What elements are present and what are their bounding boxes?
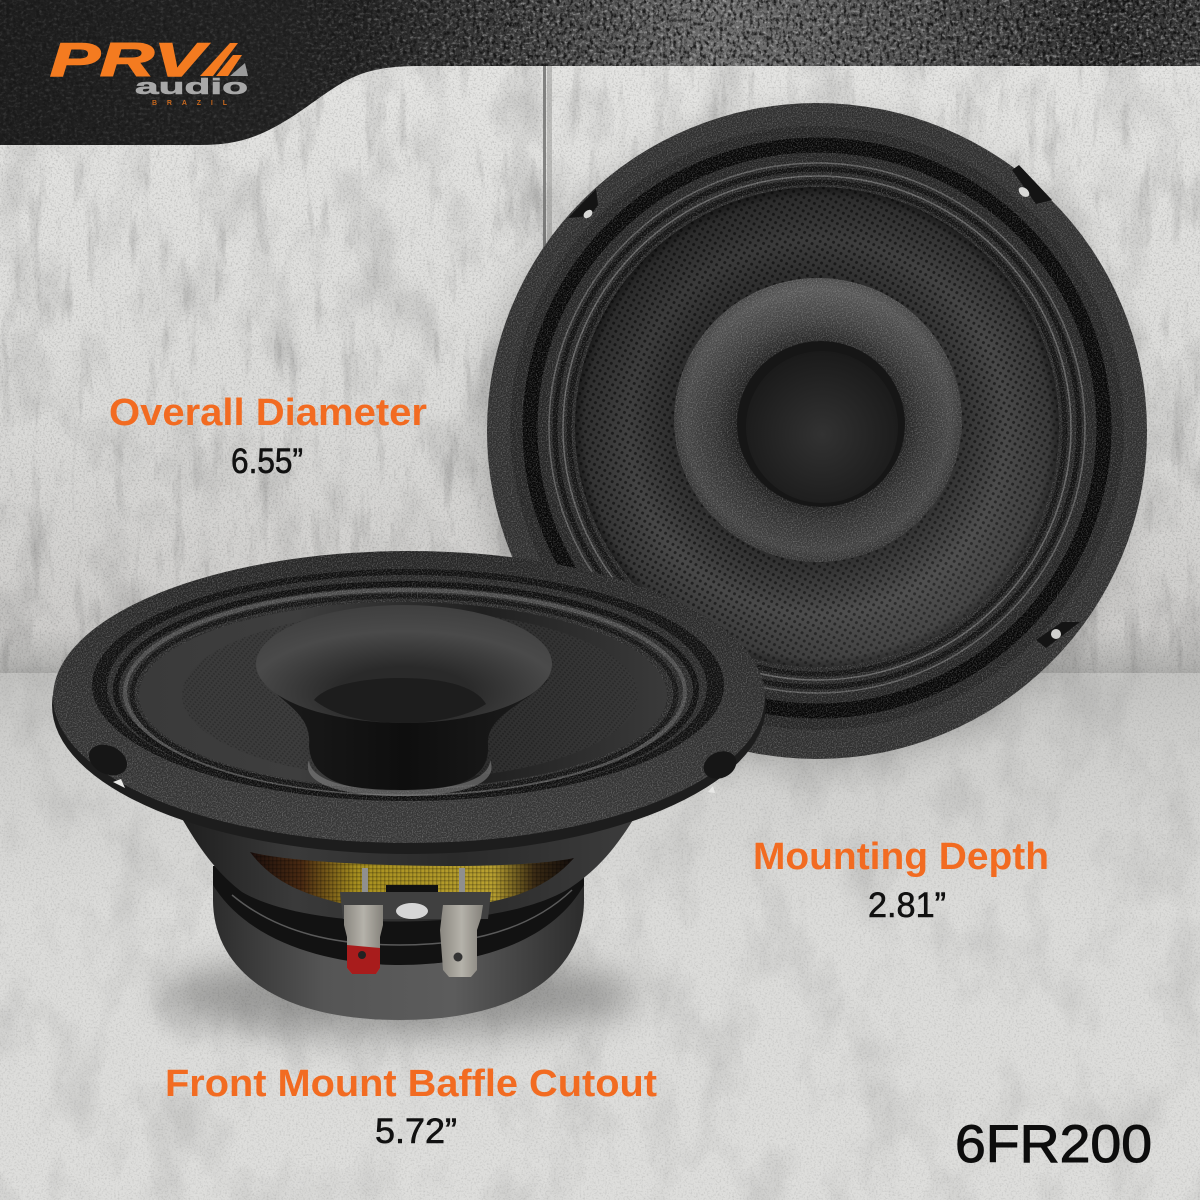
label: Overall Diameter (109, 392, 427, 481)
front speaker: glossy rim underside (52, 556, 766, 854)
rear speaker: mounting notch top left (568, 189, 598, 220)
front speaker: outer rim (53, 551, 765, 843)
logo: PRV audio Brazil (50, 33, 248, 107)
label: Front Mount Baffle Cutout (165, 1063, 657, 1151)
logo: PRV audio Brazil: audio (135, 74, 248, 99)
red terminal tab (344, 905, 383, 974)
label: Mounting Depth (753, 836, 1049, 925)
logo: PRV audio Brazil: PRV (50, 33, 210, 86)
label: Mounting Depth: 2.81” (868, 886, 946, 925)
rear speaker: center dust cap (737, 341, 905, 507)
header band with logo panel (0, 0, 1200, 146)
rear speaker: mounting notch top right (1012, 165, 1052, 204)
front speaker, angled view (52, 551, 766, 1020)
label: Overall Diameter: Overall Diameter (109, 392, 427, 434)
front speaker: surround (92, 569, 724, 801)
speaker shadow: front speaker on floor (160, 955, 640, 1035)
rear speaker: outer rim (487, 103, 1147, 759)
front speaker: terminal block (340, 868, 491, 977)
label: Mounting Depth: Mounting Depth (753, 836, 1049, 878)
rear speaker, front view (487, 103, 1147, 759)
front speaker: waveguide horn (256, 605, 552, 796)
front speaker: magnet (213, 866, 584, 1020)
rear speaker: waveguide ring (674, 278, 962, 562)
background: concrete wall (0, 0, 1200, 675)
front speaker: cone (139, 602, 667, 788)
model number: 6FR200 (955, 1115, 1152, 1174)
background: concrete floor (0, 673, 1200, 1200)
logo: PRV audio Brazil: BRAZIL (152, 100, 228, 107)
front speaker: basket with yellow spider (180, 815, 636, 922)
rear speaker: surround rings (510, 126, 1124, 730)
rear speaker: mounting notch bottom right (1036, 622, 1080, 648)
rear speaker: cone (575, 187, 1059, 667)
label: Overall Diameter: 6.55” (231, 442, 303, 481)
silver terminal tab (440, 905, 483, 977)
label: Front Mount Baffle Cutout: 5.72” (375, 1112, 457, 1151)
label: Front Mount Baffle Cutout: Front Mount Baffle Cutout (165, 1063, 657, 1105)
front speaker: mounting notch right (699, 746, 741, 793)
front speaker: mounting notch left (84, 739, 132, 788)
speaker shadow: rear speaker on wall (484, 118, 1136, 762)
